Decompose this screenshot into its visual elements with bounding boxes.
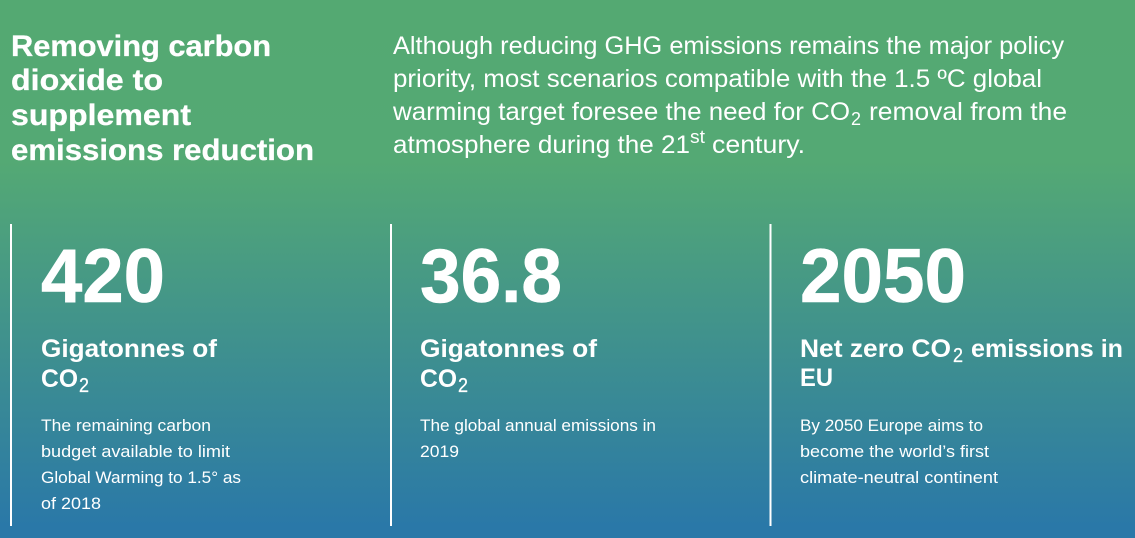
heading: Gigatonnes of CO2: Gigatonnes of	[420, 335, 598, 363]
title: Removing carbon	[11, 30, 271, 63]
description: climate-neutral continent: become the world’s first	[800, 442, 989, 461]
heading: Gigatonnes of CO2: 2	[458, 375, 468, 397]
intro paragraph: Although reducing GHG emissions remains the major policy	[393, 32, 1065, 60]
intro paragraph: century.	[712, 131, 805, 159]
description: carbon budget: Global Warming to 1.5° as	[41, 468, 241, 487]
heading: Gigatonnes of CO2: CO	[420, 365, 457, 393]
heading: Net zero CO2 emissions in EU: Net zero CO	[800, 335, 951, 363]
title: dioxide to	[11, 64, 163, 97]
description: carbon budget: The remaining carbon	[41, 416, 211, 435]
big number: 2050: 2050	[800, 234, 966, 319]
heading: Net zero CO2 emissions in EU: emissions in	[971, 335, 1123, 363]
intro paragraph: warming target foresee the need for CO	[392, 98, 850, 126]
heading: Gigatonnes of CO2: Gigatonnes of	[41, 335, 218, 363]
intro paragraph: st	[690, 127, 705, 147]
title: supplement	[11, 99, 191, 132]
description: annual emissions: 2019	[420, 442, 459, 461]
description: climate-neutral continent: By 2050 Europe aims to	[800, 416, 983, 435]
title: emissions reduction	[11, 134, 314, 167]
big number: 36.8: 36.8	[420, 234, 562, 319]
description: carbon budget: of 2018	[41, 494, 101, 513]
panel: net zero 2050	[770, 224, 1123, 526]
description: climate-neutral continent	[800, 416, 998, 487]
heading: Gigatonnes of CO2: CO	[41, 365, 78, 393]
intro paragraph: priority, most scenarios compatible with the 1.5 ºC global	[393, 65, 1042, 93]
title	[11, 30, 314, 167]
description: annual emissions: The global annual emissions in	[420, 416, 656, 435]
description: carbon budget: budget available to limit	[41, 442, 230, 461]
panel: global annual emissions	[390, 224, 656, 526]
panel: remaining carbon budget	[10, 224, 241, 526]
intro paragraph	[392, 32, 1067, 159]
intro paragraph: 2	[851, 109, 861, 129]
heading: Net zero CO2 emissions in EU: EU	[800, 364, 833, 392]
heading: Gigatonnes of CO2	[420, 335, 598, 397]
heading: Gigatonnes of CO2: 2	[79, 375, 89, 397]
intro paragraph: removal from the	[869, 98, 1067, 126]
heading: Net zero CO2 emissions in EU: 2	[953, 345, 963, 367]
heading: Gigatonnes of CO2	[41, 335, 218, 397]
big number: 420: 420	[41, 234, 165, 319]
intro paragraph: atmosphere during the 21	[393, 131, 690, 159]
description: climate-neutral continent: climate-neutral continent	[800, 468, 998, 487]
description: carbon budget	[41, 416, 241, 513]
description: annual emissions	[420, 416, 656, 461]
heading: Net zero CO2 emissions in EU	[800, 335, 1123, 392]
